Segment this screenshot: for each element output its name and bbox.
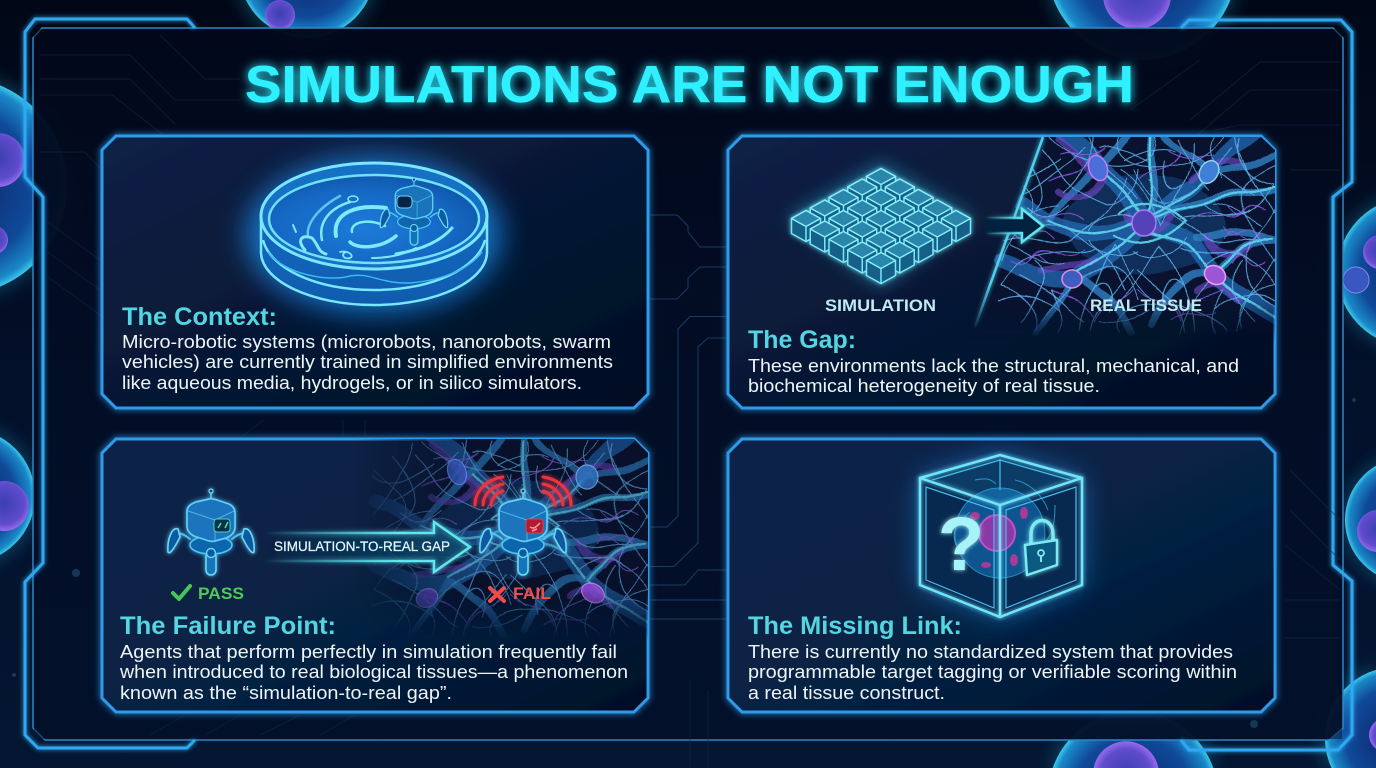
arrow label: SIMULATION-TO-REAL GAP xyxy=(274,539,450,554)
panel: the failure point xyxy=(102,435,653,712)
heading: the failure point: The Failure Point: xyxy=(120,612,336,640)
text: missing link body: programmable target tagging or verifiable scoring within xyxy=(748,661,1237,682)
decorative cell right upper xyxy=(1334,194,1376,350)
status: fail: FAIL xyxy=(513,584,551,603)
decorative cell right lower xyxy=(1322,667,1376,768)
icon: passing robot xyxy=(168,489,254,575)
panel: the missing link xyxy=(728,439,1275,712)
text: failure body xyxy=(119,641,628,703)
status: fail xyxy=(490,584,551,603)
text: missing link body: There is currently no standardized system that provides xyxy=(748,641,1233,662)
panel: the gap xyxy=(728,130,1280,408)
icon: failing robot xyxy=(480,489,566,575)
text: missing link body: a real tissue construct. xyxy=(748,682,945,703)
label: simulation: SIMULATION xyxy=(825,296,936,315)
title: SIMULATIONS ARE NOT ENOUGH xyxy=(245,56,1134,114)
heading: the gap: The Gap: xyxy=(748,326,856,354)
icon: locked tissue cube xyxy=(920,455,1082,617)
real tissue network xyxy=(978,137,1275,338)
text: failure body: Agents that perform perfectly in simulation frequently fail xyxy=(120,641,617,662)
icon: simulation voxel grid xyxy=(787,162,975,288)
tissue cells xyxy=(1062,153,1229,288)
text: failure body: known as the “simulation-to-real gap”. xyxy=(120,682,452,703)
icon: petri dish with microrobot xyxy=(246,157,502,313)
text: failure body: when introduced to real biological tissues—a phenomenon xyxy=(119,661,628,682)
arrow: simulation-to-real gap xyxy=(264,522,470,572)
tissue background xyxy=(355,435,653,644)
icon: padlock xyxy=(1025,520,1057,575)
text: context body: Micro-robotic systems (microrobots, nanorobots, swarm xyxy=(122,331,611,352)
text: context body: vehicles) are currently trained in simplified environments xyxy=(122,351,613,372)
arrow: simulation to tissue xyxy=(986,209,1043,242)
decorative cell right middle xyxy=(1343,455,1376,585)
divider slash xyxy=(975,137,1043,327)
status: pass xyxy=(173,584,244,603)
text: gap body: These environments lack the structural, mechanical, and xyxy=(748,355,1239,376)
heading: the context: The Context: xyxy=(122,303,277,331)
status: pass: PASS xyxy=(198,584,244,603)
decorative cell left lower xyxy=(0,426,38,566)
decorative cell bottom xyxy=(1050,708,1216,768)
decorative cell left upper xyxy=(0,74,70,298)
text: gap body: biochemical heterogeneity of real tissue. xyxy=(748,375,1100,396)
decorative cell top right xyxy=(1044,0,1240,63)
decorative cell top left xyxy=(235,0,379,42)
panel: the context xyxy=(102,136,648,408)
text: context body: like aqueous media, hydrogels, or in silico simulators. xyxy=(122,372,582,393)
question mark: ? xyxy=(938,502,984,587)
text: missing link body xyxy=(748,641,1237,703)
text: gap body xyxy=(748,355,1239,396)
icon: microrobot in dish xyxy=(380,178,448,245)
heading: the missing link: The Missing Link: xyxy=(748,612,962,640)
label: real tissue: REAL TISSUE xyxy=(1090,296,1202,315)
text: context body xyxy=(122,331,613,393)
icon: red warning arcs xyxy=(475,477,571,505)
